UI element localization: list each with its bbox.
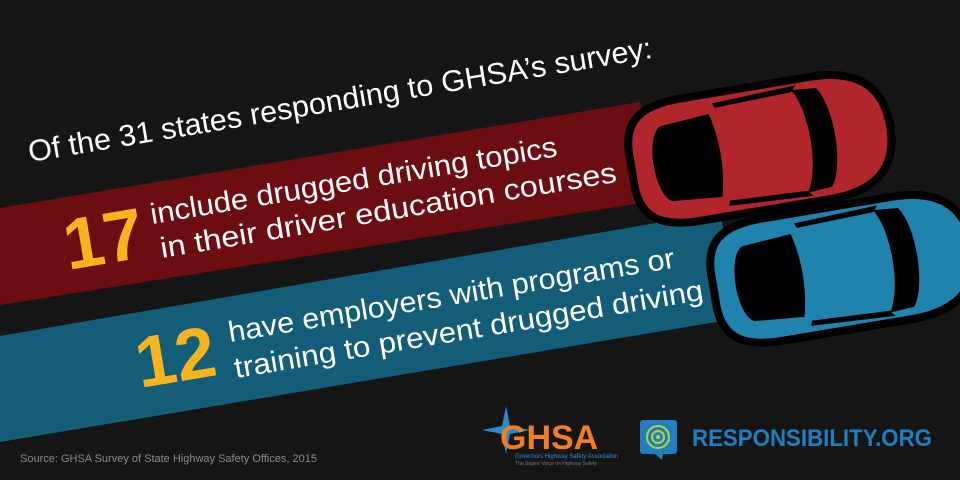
title: Of the 31 states responding to GHSA’s survey:	[26, 32, 654, 169]
source: Source: GHSA Survey of State Highway Safety Offices, 2015	[20, 453, 317, 465]
stat 12: have employers with programs or	[226, 243, 677, 349]
logo: responsibility.org: RESPONSIBILITY.ORG	[692, 425, 932, 452]
band: red	[0, 102, 660, 305]
stat 17: include drugged driving topics	[148, 131, 560, 231]
band: blue	[0, 212, 740, 442]
stat 17: in their driver education courses	[158, 157, 619, 265]
stat 12	[129, 243, 706, 404]
logo: GHSA: Governors Highway Safety Association	[515, 454, 618, 460]
logo: responsibility.org	[640, 420, 932, 460]
stat 12: training to prevent drugged driving	[232, 275, 706, 385]
stat 12: 12	[129, 312, 222, 404]
logo: GHSA	[482, 406, 618, 467]
stat 17	[57, 131, 619, 286]
logo: GHSA: GHSA	[500, 419, 598, 457]
car: red	[621, 65, 900, 231]
car: blue	[703, 185, 960, 351]
logo: GHSA: The States' Voice on Highway Safety	[515, 461, 597, 467]
stat 17: 17	[57, 194, 150, 286]
